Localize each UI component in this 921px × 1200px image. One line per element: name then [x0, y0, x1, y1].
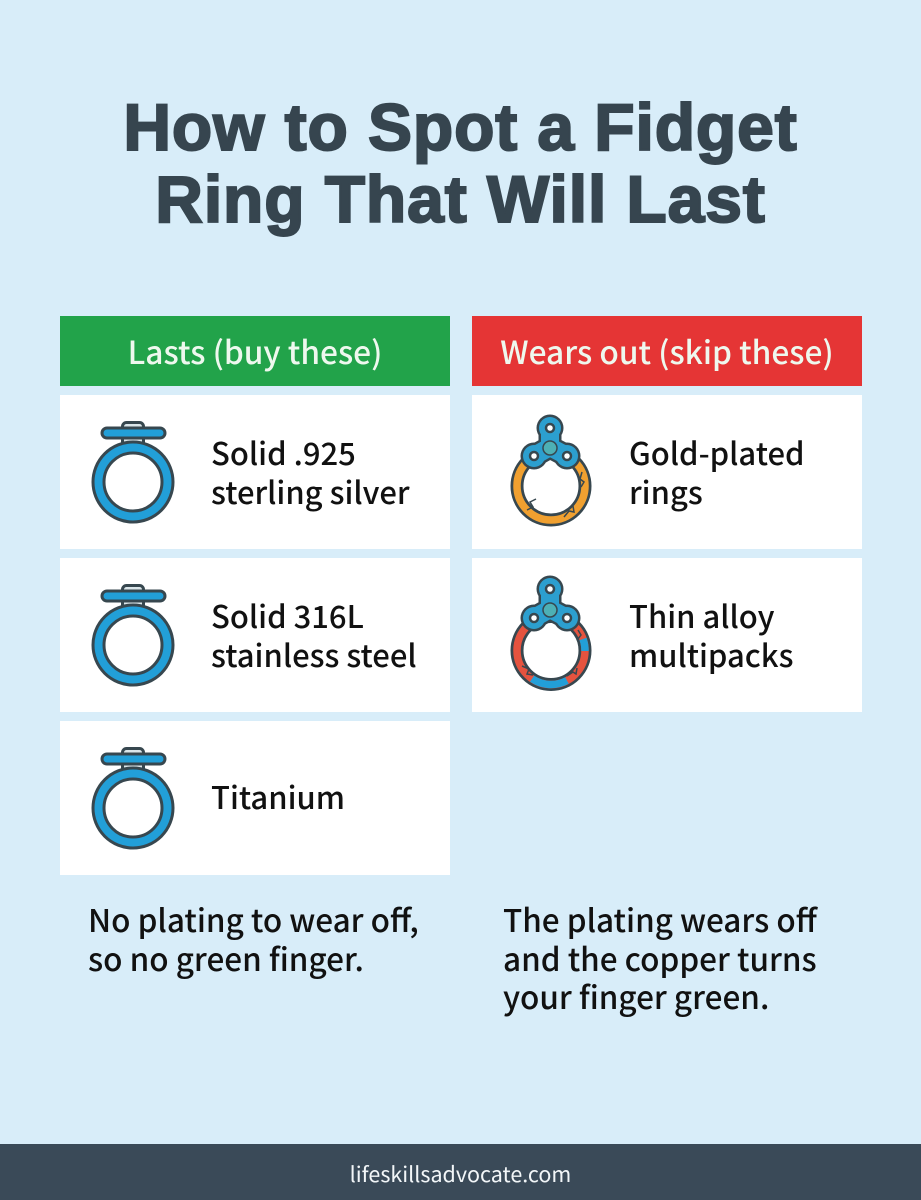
icon: solid ring [92, 584, 174, 686]
header: wears out [472, 316, 862, 386]
label: Gold-plated [629, 429, 805, 474]
label: stainless steel [211, 630, 417, 676]
header: wears out: Wears out (skip these) [500, 328, 834, 374]
note: wears out: and the copper turns [503, 934, 817, 980]
note: lasts: No plating to wear off, [88, 896, 419, 942]
title: Ring That Will Last [155, 162, 766, 236]
label: multipacks [629, 630, 794, 676]
panel: thin alloy [472, 558, 862, 712]
icon: corroded spinner ring [510, 576, 592, 691]
icon: solid ring [92, 421, 174, 524]
header: lasts: Lasts (buy these) [128, 328, 382, 374]
label: sterling silver [211, 468, 410, 512]
note: lasts: so no green finger. [88, 934, 364, 980]
note: wears out [503, 896, 818, 1019]
icon: gold-plated spinner ring [510, 414, 592, 526]
label: Solid 316L [211, 592, 364, 637]
label [211, 592, 417, 676]
panel: titanium [60, 721, 450, 875]
panel: sterling silver [60, 395, 450, 549]
icon: solid ring [92, 747, 174, 850]
label [629, 592, 794, 676]
footer [0, 1144, 921, 1200]
title: How to Spot a Fidget [123, 90, 798, 164]
title [123, 90, 798, 237]
panel: stainless steel [60, 558, 450, 712]
footer: lifeskillsadvocate.com [350, 1158, 571, 1189]
panel: gold-plated [472, 395, 862, 549]
label: Solid .925 [211, 429, 356, 474]
note: lasts [88, 896, 419, 980]
label [211, 429, 410, 512]
header: lasts [60, 316, 450, 386]
note: wears out: The plating wears off [503, 896, 817, 942]
label [629, 429, 805, 512]
label: rings [629, 468, 703, 512]
label: Titanium [211, 773, 345, 818]
note: wears out: your finger green. [503, 973, 769, 1019]
label: Thin alloy [629, 592, 774, 637]
